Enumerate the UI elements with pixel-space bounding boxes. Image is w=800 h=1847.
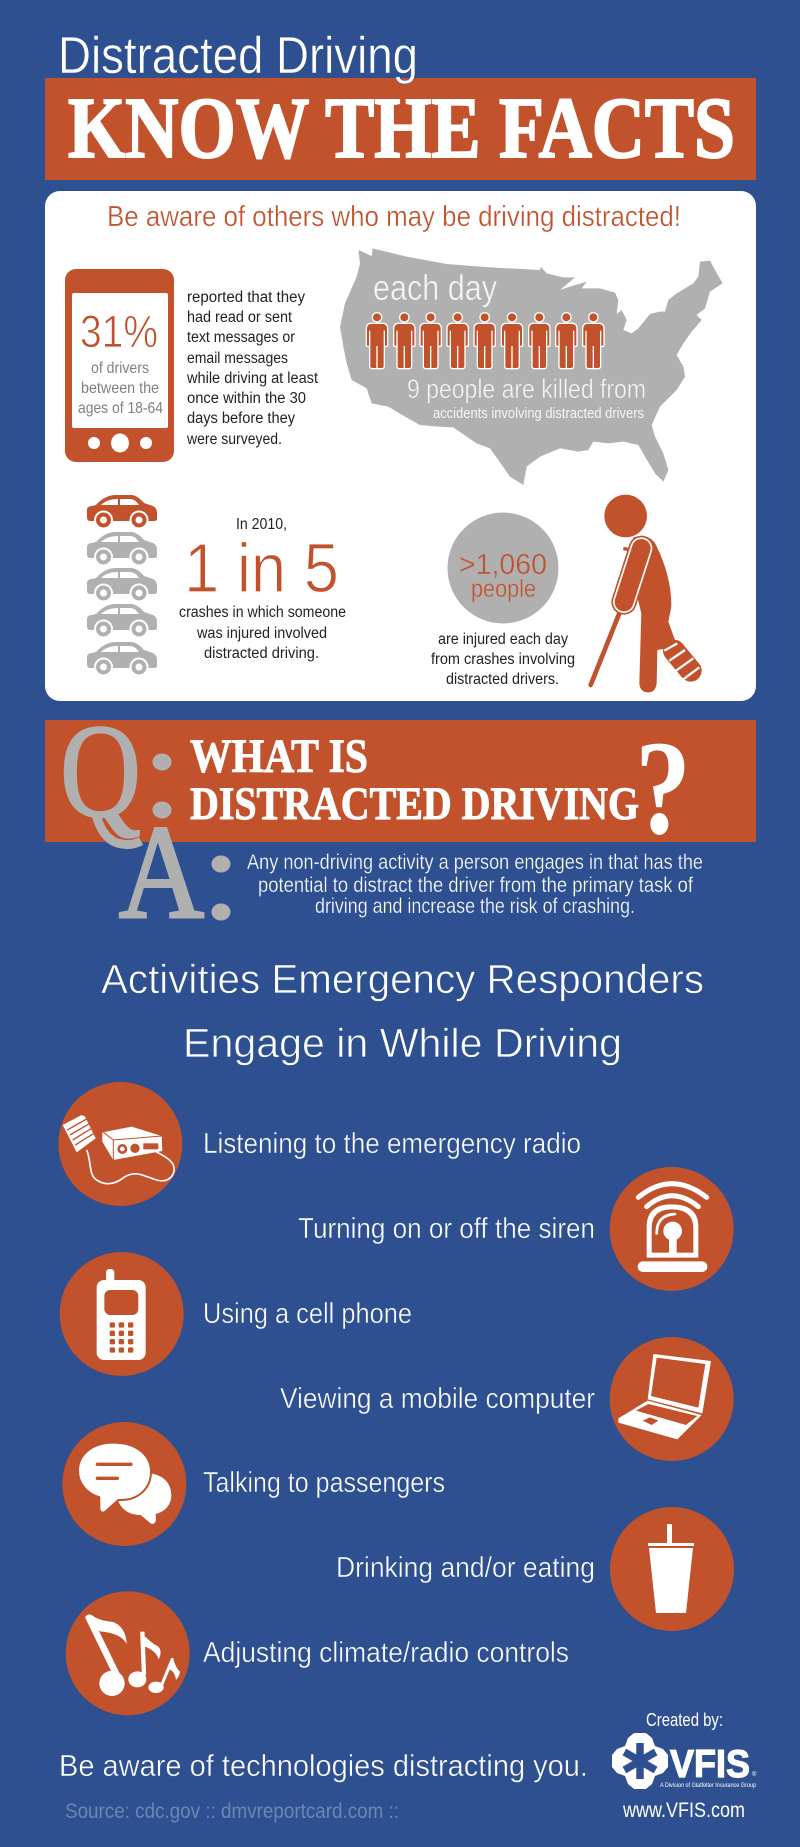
icon: speech bubbles: [62, 1422, 186, 1546]
icon: smartphone with 31% stat: of drivers: [91, 360, 149, 377]
icon: smartphone with 31% stat: [65, 269, 174, 462]
question mark: ?: [635, 714, 691, 863]
heading: be aware: Be aware of others who may be driving distracted!: [107, 201, 681, 233]
stat: 1,060 people injured: people: [471, 575, 536, 603]
text: texting statistic: [186, 289, 319, 448]
letter: A: A: [119, 798, 204, 946]
icon: injured person on crutch: [591, 495, 699, 692]
icon: music notes: [66, 1591, 190, 1715]
letter: Q: Q: [60, 697, 141, 845]
map: United States with daily deaths: [340, 248, 723, 485]
logo: VFIS cross: [612, 1733, 668, 1789]
stat: 1 in 5 crashes: In 2010,: [236, 516, 287, 533]
icon: radio: [58, 1082, 182, 1206]
icon: smartphone with 31% stat: 31%: [80, 306, 158, 357]
text: texting statistic: while driving at least: [186, 370, 319, 387]
colon: A: [212, 856, 230, 920]
panel: facts: [45, 191, 756, 701]
text: answer: [247, 851, 703, 918]
text: source: Source: cdc.gov :: dmvreportcard.com ::: [65, 1800, 399, 1823]
text: texting statistic: once within the 30: [187, 390, 306, 407]
text: each day: each day: [373, 267, 497, 308]
icon: smartphone with 31% stat: ages of 18-64: [78, 400, 163, 417]
stat: 1,060 people injured: are injured each day: [438, 631, 568, 648]
credit: VFIS: A Division of Glatfelter Insurance Group: [660, 1783, 757, 1789]
text: texting statistic: email messages: [187, 350, 288, 367]
stat: 1,060 people injured: from crashes involving: [431, 651, 575, 668]
text: answer: potential to distract the driver from the primary task of: [258, 874, 693, 897]
logo: VFIS wordmark: VFIS: [670, 1743, 750, 1786]
stat: 1 in 5 crashes: [179, 516, 346, 662]
pictogram: five cars, one highlighted: [87, 495, 157, 676]
icon: cup: [610, 1507, 734, 1631]
stat: 1,060 people injured: distracted drivers.: [446, 671, 559, 688]
activity: siren: [298, 1167, 734, 1291]
activity: cell phone: [60, 1252, 412, 1376]
label: Using a cell phone: [203, 1298, 412, 1330]
text: answer: Any non-driving activity a person engages in that has the: [247, 851, 703, 874]
icon: siren: [610, 1167, 734, 1291]
label: Talking to passengers: [203, 1467, 445, 1499]
activity: mobile computer: [280, 1337, 734, 1461]
credit: VFIS: Created by:: [646, 1710, 723, 1730]
label: Drinking and/or eating: [336, 1552, 595, 1584]
heading: what is: WHAT IS: [190, 730, 368, 783]
credit: VFIS: ®: [752, 1771, 757, 1778]
text: texting statistic: were surveyed.: [186, 431, 282, 448]
text: texting statistic: had read or sent: [187, 309, 293, 326]
icon: smartphone with 31% stat: between the: [81, 380, 159, 397]
heading: activities: [101, 956, 704, 1066]
url: www.VFIS.com: [622, 1799, 745, 1822]
icon: cell phone: [60, 1252, 184, 1376]
text: be aware of technologies: Be aware of technologies distracting you.: [59, 1748, 588, 1783]
label: Turning on or off the siren: [298, 1213, 595, 1245]
icon: laptop: [610, 1337, 734, 1461]
stat: 1,060 people injured: >1,060: [459, 549, 547, 581]
activity: drinking: [336, 1507, 734, 1631]
heading: distracted driving: DISTRACTED DRIVING: [190, 778, 639, 830]
colon: Q: [152, 754, 172, 818]
stat: 1,060 people injured: [431, 512, 575, 688]
text: texting statistic: reported that they: [187, 289, 305, 306]
stat: 1 in 5 crashes: crashes in which someone: [179, 604, 346, 621]
heading: activities: Activities Emergency Responders: [101, 956, 704, 1002]
heading: activities: Engage in While Driving: [183, 1020, 622, 1066]
activity: climate and radio controls: [66, 1591, 569, 1715]
label: Viewing a mobile computer: [280, 1383, 595, 1415]
stat: 1 in 5 crashes: was injured involved: [196, 625, 327, 642]
stat: 1 in 5 crashes: 1 in 5: [184, 529, 339, 607]
text: 9 people are killed: 9 people are killed from: [407, 374, 646, 404]
title: Distracted Driving: Distracted Driving: [58, 27, 418, 85]
label: Listening to the emergency radio: [203, 1128, 581, 1160]
text: texting statistic: text messages or: [187, 329, 295, 346]
text: texting statistic: days before they: [187, 410, 295, 427]
stat: 1 in 5 crashes: distracted driving.: [204, 645, 319, 662]
pictogram: nine people: [366, 313, 604, 369]
label: Adjusting climate/radio controls: [203, 1637, 569, 1669]
activity: talking: [62, 1422, 445, 1546]
text: accidents involving: accidents involving distracted drivers: [433, 405, 644, 422]
credit: VFIS: [612, 1710, 757, 1822]
activity: emergency radio: [58, 1082, 581, 1206]
text: answer: driving and increase the risk of crashing.: [315, 895, 635, 918]
banner: Q and A: [45, 697, 756, 946]
